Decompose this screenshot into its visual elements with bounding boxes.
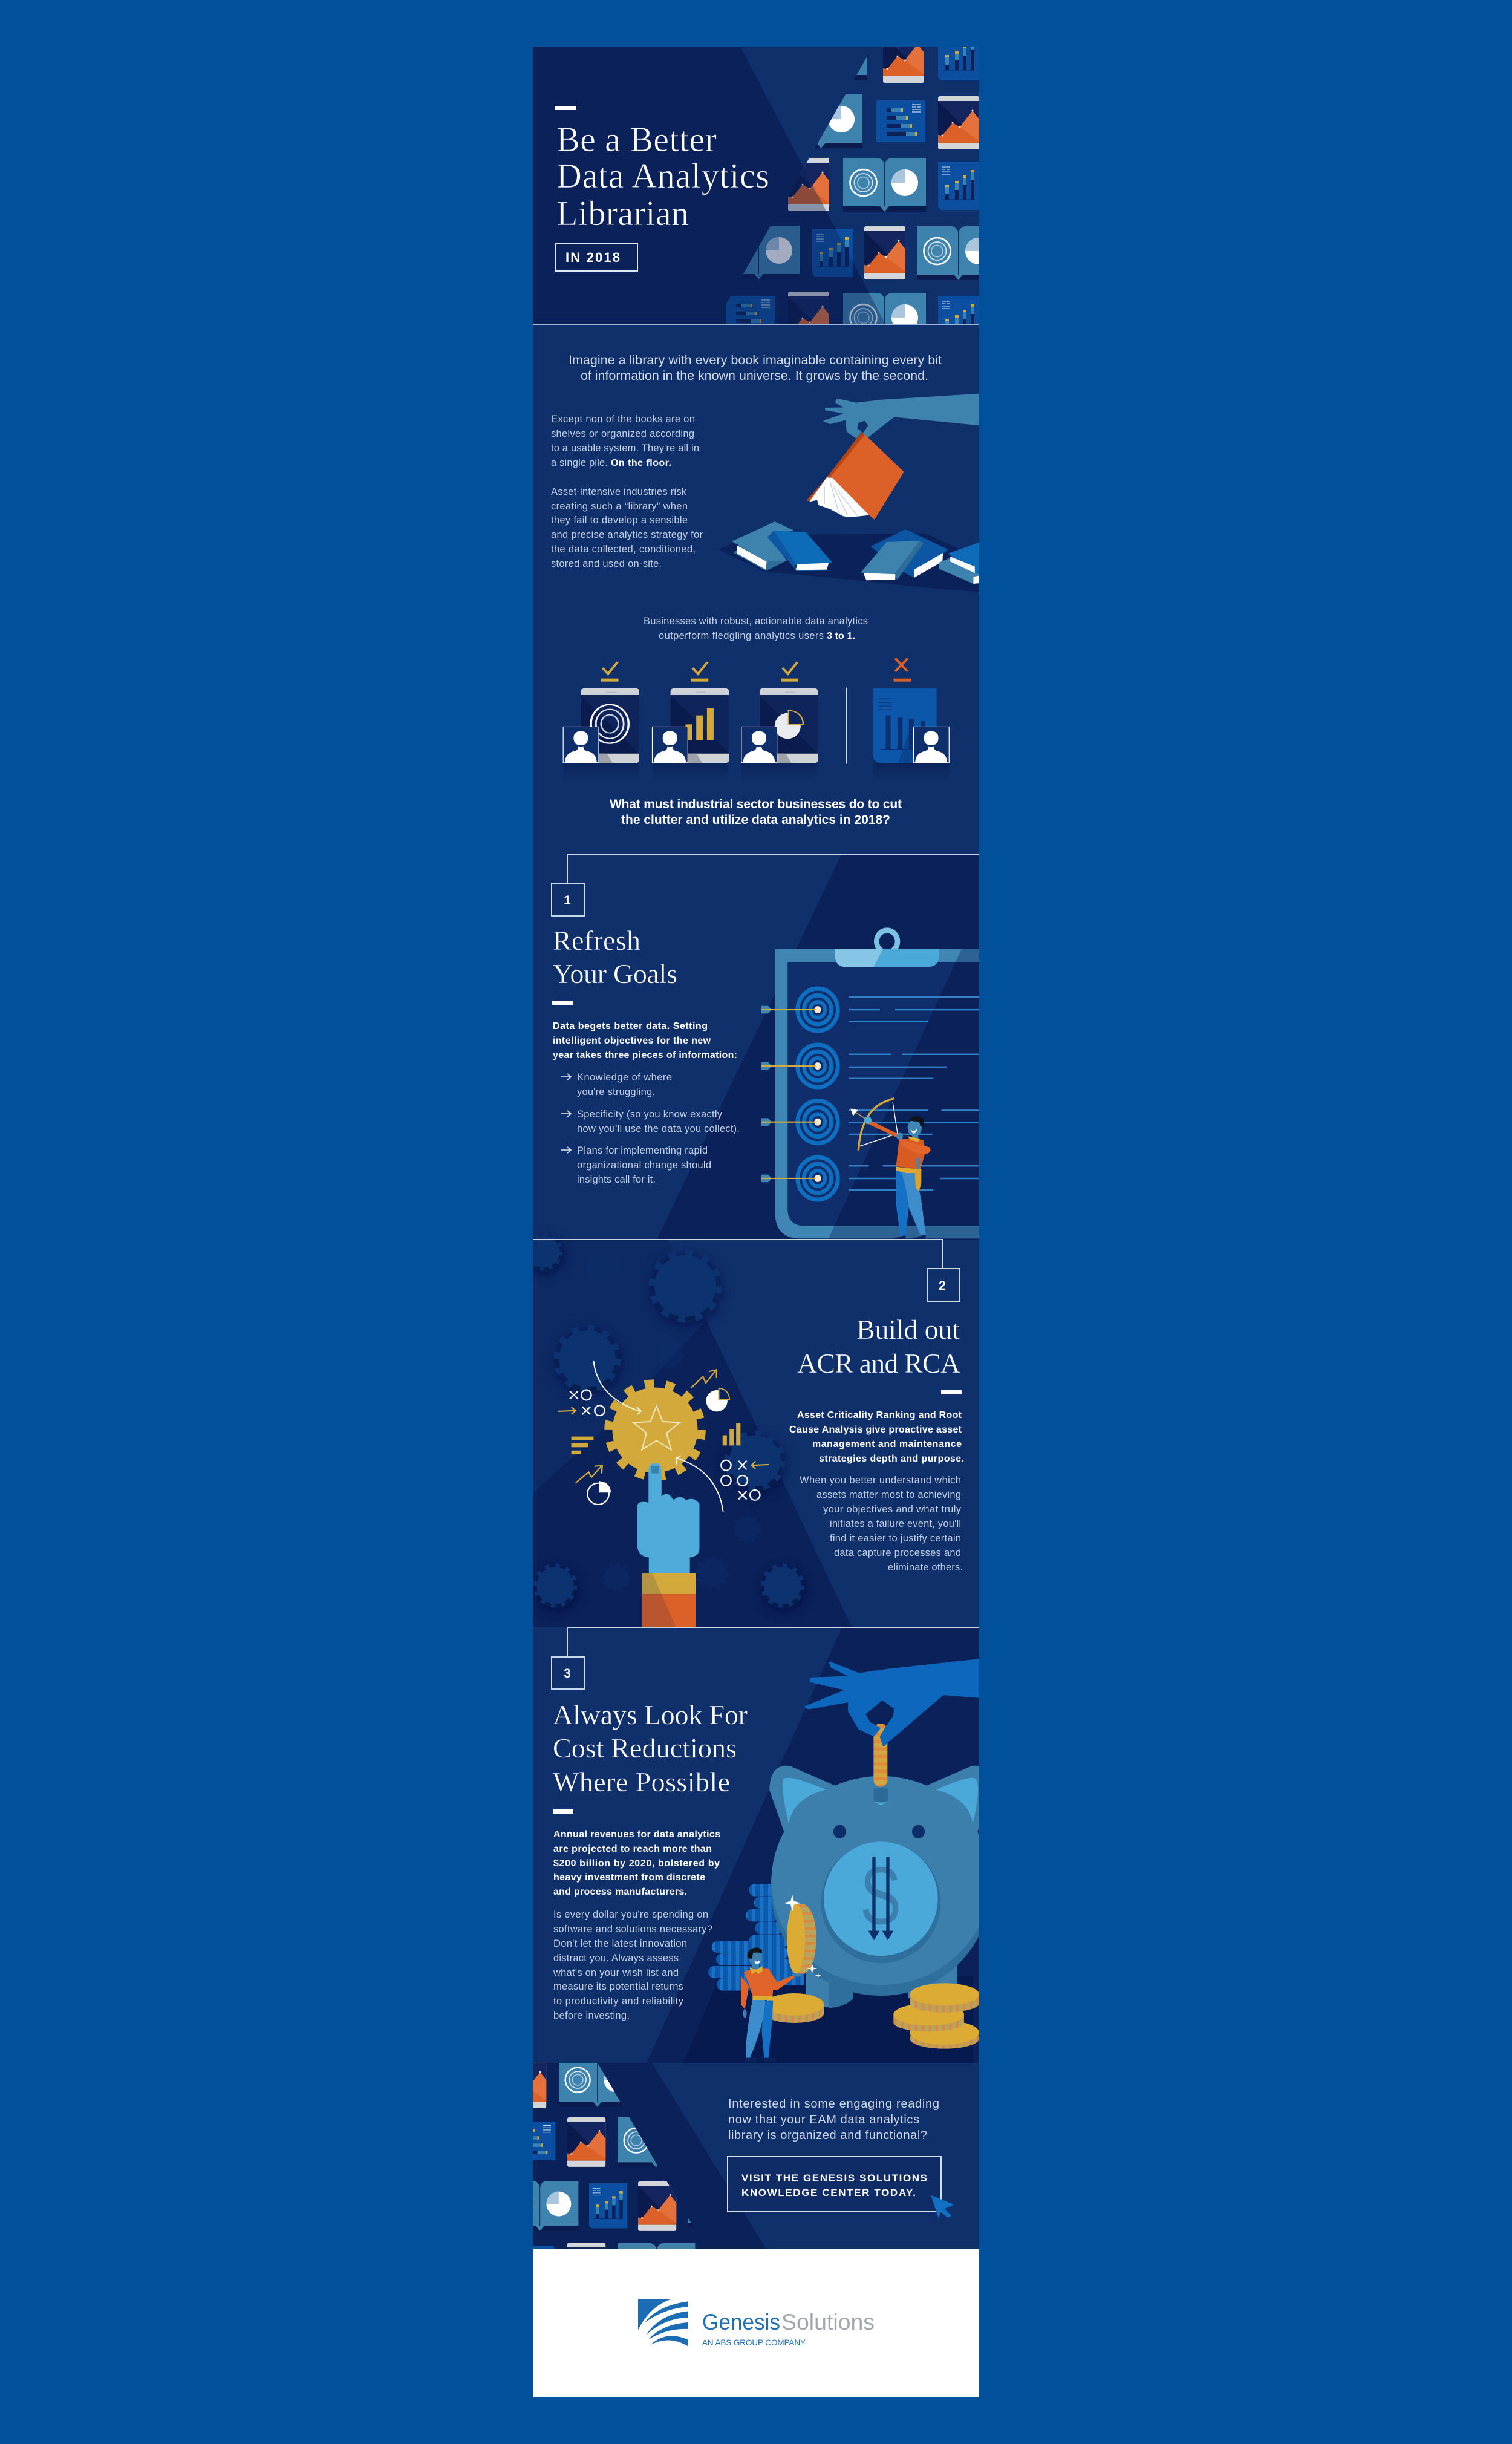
body text: Is every dollar you're spending on	[553, 1909, 708, 1920]
connector line	[567, 854, 979, 883]
illustration: background gears	[526, 1234, 803, 1606]
divider line	[533, 324, 979, 325]
icon: pig legs	[806, 1950, 957, 2008]
statistic sentence: outperform fledgling analytics users	[659, 630, 824, 641]
illustration: faint gears	[585, 1250, 761, 1591]
lead text: strategies depth and purpose.	[819, 1454, 964, 1464]
dollar sign on snout: S	[860, 1850, 901, 1941]
icon: pile of books	[732, 521, 979, 584]
call to action text: library is organized and functional?	[728, 2129, 927, 2142]
heading bar	[941, 1390, 962, 1394]
title: Be a Better	[556, 120, 717, 159]
title: Data Analytics	[556, 156, 769, 195]
text block: books on the floor: Asset-intensive industries risk	[551, 486, 687, 497]
heading: Refresh	[553, 925, 640, 956]
illustration: blue coin stacks	[708, 1884, 804, 1991]
step number: 2	[939, 1279, 946, 1293]
title	[558, 128, 768, 225]
phone with pie chart	[741, 688, 818, 763]
step number: 3	[564, 1667, 571, 1681]
lead text	[553, 1021, 737, 1060]
illustration: clipboard with targets and archer	[761, 930, 980, 1239]
icon: pig body	[771, 1776, 991, 1996]
statistic sentence: 3 to 1.	[827, 631, 855, 641]
list with arrows: how you'll use the data you collect).	[577, 1123, 740, 1134]
call to action text	[728, 2097, 939, 2142]
lead text: are projected to reach more than	[553, 1844, 712, 1854]
lead text: heavy investment from discrete	[553, 1872, 705, 1883]
heading	[553, 1699, 748, 1797]
icon: hand	[824, 394, 979, 440]
infographic panel	[533, 47, 979, 2397]
statistic sentence: Businesses with robust, actionable data analytics	[644, 616, 868, 627]
list with arrows	[561, 1072, 740, 1185]
lead text: Data begets better data. Setting	[553, 1021, 708, 1031]
intro statement: of information in the known universe. It grows by the second.	[581, 368, 928, 383]
step number	[927, 1269, 959, 1301]
ground shadows	[563, 763, 949, 773]
text block: books on the floor: stored and used on-site.	[551, 558, 662, 569]
lead text: Cause Analysis give proactive asset	[789, 1425, 962, 1435]
targets with arrows	[761, 986, 840, 1202]
lead text: and process manufacturers.	[553, 1887, 687, 1897]
lead text	[789, 1410, 964, 1464]
body text: When you better understand which	[800, 1475, 961, 1486]
call to action text: now that your EAM data analytics	[728, 2113, 919, 2126]
panel: footer call to action	[501, 2057, 979, 2293]
icon: falling book	[806, 431, 904, 520]
body text: eliminate others.	[888, 1562, 963, 1573]
panel: step 1 refresh your goals	[552, 854, 980, 1240]
lead text: Asset Criticality Ranking and Root	[797, 1410, 962, 1420]
icon: check marks	[601, 662, 798, 682]
icon: gold arrows	[558, 1370, 769, 1483]
body text: initiates a failure event, you'll	[830, 1518, 961, 1529]
list with arrows: Knowledge of where	[577, 1072, 672, 1083]
report with person, crossed out	[873, 688, 949, 763]
question	[610, 797, 902, 827]
icon: sparkles	[784, 1895, 821, 1979]
year badge: IN 2018	[565, 250, 620, 265]
title: Librarian	[556, 194, 689, 233]
heading: Build out	[856, 1314, 960, 1345]
body text: your objectives and what truly	[823, 1504, 962, 1515]
intro statement: Imagine a library with every book imaginable containing every bit	[569, 353, 942, 367]
lead text: management and maintenance	[812, 1439, 962, 1449]
list with arrows: you're struggling.	[577, 1086, 655, 1097]
list with arrows: Specificity (so you know exactly	[577, 1109, 723, 1120]
text block: books on the floor: Except non of the books are on	[551, 414, 695, 425]
intro statement	[569, 353, 942, 383]
text block: books on the floor: creating such a “library” when	[551, 501, 688, 512]
icon: X mark	[893, 658, 911, 682]
icon: double down arrows	[868, 1857, 893, 1940]
text block: books on the floor: and precise analytics strategy for	[551, 529, 703, 540]
icon: Genesis Solutions logo mark	[638, 2299, 688, 2346]
icon: play marks right	[721, 1460, 760, 1500]
list with arrows: Plans for implementing rapid	[577, 1145, 708, 1156]
heading	[797, 1314, 960, 1379]
body text: Don't let the latest innovation	[553, 1938, 687, 1949]
panel: step 2 build out ACR and RCA	[526, 1234, 964, 1627]
body text	[553, 1909, 712, 2021]
panel: logo footer	[533, 2249, 979, 2397]
logo wordmark: AN ABS GROUP COMPANY	[702, 2338, 806, 2347]
step number	[552, 1657, 584, 1689]
statistic sentence	[644, 616, 868, 641]
floor	[683, 1976, 973, 2063]
call to action text: Interested in some engaging reading	[728, 2097, 939, 2111]
text block: books on the floor: a single pile.	[551, 457, 608, 468]
icon: gold coin behind man	[764, 1993, 824, 2023]
clipboard	[775, 930, 980, 1238]
heading bar	[553, 1809, 573, 1814]
text block: books on the floor: On the floor.	[611, 458, 671, 468]
heading: Your Goals	[553, 958, 677, 989]
text block: books on the floor: shelves or organized according	[551, 428, 694, 439]
heading: Cost Reductions	[553, 1733, 737, 1763]
illustration: hand dropping coin	[806, 1660, 979, 1787]
connector line	[567, 1627, 979, 1657]
logo wordmark: Solutions	[781, 2310, 875, 2335]
button: VISIT THE GENESIS SOLUTIONS	[741, 2172, 927, 2184]
step number: 1	[564, 894, 571, 907]
body text: assets matter most to achieving	[816, 1489, 961, 1500]
man holding coin	[741, 1947, 802, 2062]
lead text	[553, 1829, 720, 1897]
body text: software and solutions necessary?	[553, 1924, 712, 1935]
icon: pointing hand	[637, 1463, 699, 1627]
body text: before investing.	[553, 2010, 630, 2021]
body text: measure its potential returns	[553, 1981, 683, 1992]
body text: distract you. Always assess	[553, 1953, 679, 1964]
illustration: hand dropping book onto pile	[719, 394, 979, 592]
list with arrows: insights call for it.	[577, 1174, 656, 1185]
title accent bar	[555, 106, 576, 110]
logo wordmark	[702, 2310, 875, 2347]
panel: step 3 cost reductions	[533, 1627, 991, 2063]
body text	[800, 1475, 963, 1573]
illustration: analytics users comparison	[563, 658, 949, 782]
list with arrows: organizational change should	[577, 1160, 711, 1171]
note lines	[849, 997, 980, 1190]
lead text: intelligent objectives for the new	[553, 1036, 711, 1046]
body text: to productivity and reliability	[553, 1996, 684, 2007]
phone with bar chart	[652, 688, 729, 763]
illustration: piggy bank with hand	[771, 1768, 991, 2008]
step number	[552, 883, 584, 916]
illustration: gold gear with star	[609, 1384, 701, 1476]
background facets	[532, 1240, 852, 1627]
heading: Where Possible	[553, 1766, 730, 1797]
icon: large held coin	[787, 1904, 816, 1974]
body text: what's on your wish list and	[553, 1967, 679, 1978]
logo wordmark: Genesis	[702, 2310, 780, 2335]
connector line	[533, 1240, 942, 1269]
divider	[846, 688, 847, 764]
icon: play marks left	[570, 1390, 605, 1416]
button: KNOWLEDGE CENTER TODAY.	[741, 2187, 916, 2198]
illustration: grid of books, tablets and reports	[501, 2057, 764, 2293]
year badge	[555, 243, 637, 271]
button	[728, 2157, 941, 2212]
text block: books on the floor	[551, 414, 703, 569]
icon: gold coin stack	[893, 1983, 979, 2049]
floor shadow	[719, 523, 979, 592]
question: What must industrial sector businesses do to cut	[610, 797, 902, 811]
heading	[553, 925, 677, 989]
panel: header with title and book grid	[533, 47, 979, 324]
heading: Always Look For	[553, 1699, 748, 1730]
icon: chalk arcs	[593, 1361, 723, 1512]
icon: pie charts	[587, 1388, 729, 1505]
heading bar	[552, 1001, 573, 1005]
icon: gold bars	[572, 1423, 740, 1454]
phone with rings	[563, 688, 639, 763]
illustration: grid of books, tablets and reports	[717, 27, 1000, 347]
lead text: Annual revenues for data analytics	[553, 1829, 720, 1840]
lead text: year takes three pieces of information:	[553, 1050, 737, 1060]
body text: find it easier to justify certain	[830, 1533, 961, 1544]
illustration: coin, arrows, man and gold coins	[741, 1857, 979, 2062]
lead text: $200 billion by 2020, bolstered by	[553, 1858, 720, 1869]
text block: books on the floor: the data collected, conditioned,	[551, 544, 696, 555]
question: the clutter and utilize data analytics in 2018?	[621, 813, 890, 827]
body text: data capture processes and	[834, 1547, 961, 1558]
text block: books on the floor: to a usable system. They're all in	[551, 443, 699, 454]
icon: cursor	[931, 2195, 954, 2218]
heading: ACR and RCA	[797, 1348, 960, 1379]
icon: pig ears	[772, 1768, 990, 1832]
text block: books on the floor: they fail to develop a sensible	[551, 515, 688, 526]
archer	[850, 1099, 931, 1239]
illustration: pointing hand and icons	[558, 1361, 769, 1627]
